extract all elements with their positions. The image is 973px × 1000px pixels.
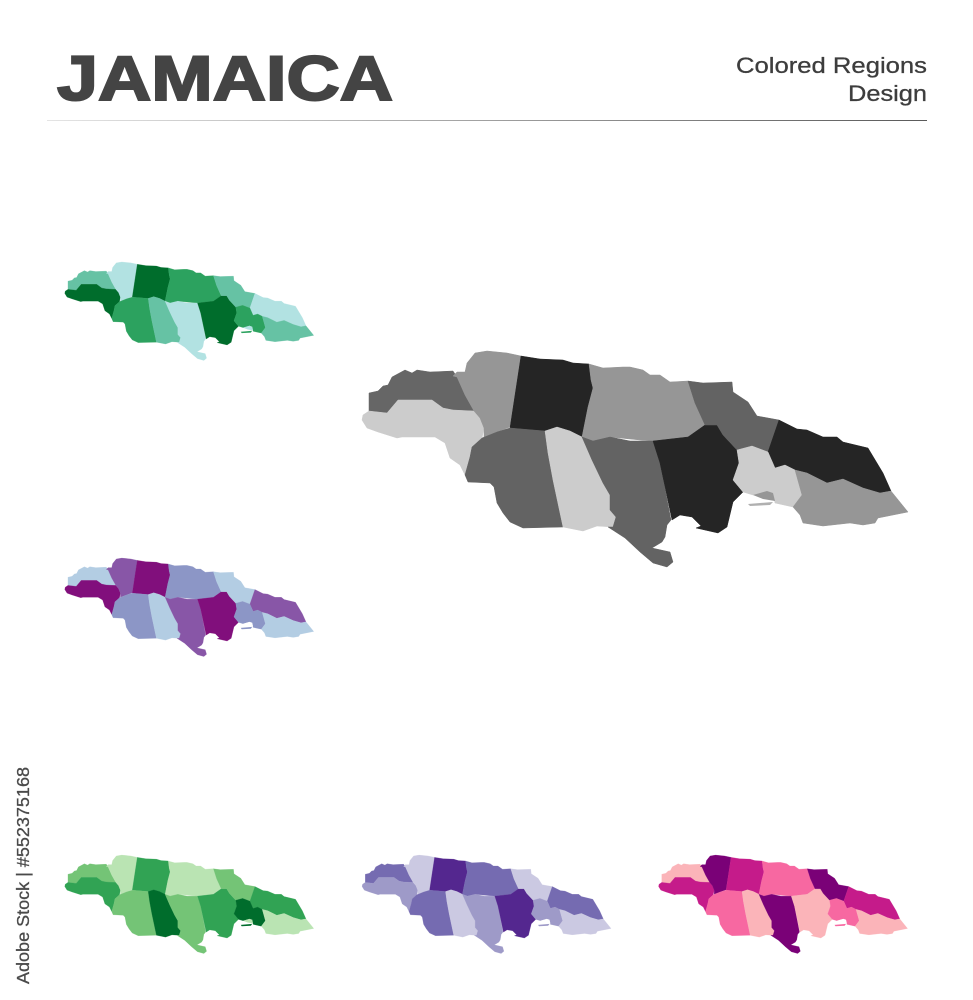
map: blue purple Jamaica xyxy=(65,558,314,657)
map: teal green Jamaica xyxy=(65,262,314,360)
subtitle: Design xyxy=(848,81,927,106)
region: Manchester xyxy=(545,427,616,531)
stock credit: Adobe Stock | #552375168 xyxy=(13,767,33,984)
region: St Thomas xyxy=(793,470,908,526)
region: St Catherine xyxy=(653,425,743,533)
region: St Ann xyxy=(582,364,705,441)
map: green Jamaica xyxy=(65,855,314,954)
header rule xyxy=(47,120,927,121)
title: JAMAICA xyxy=(57,44,393,114)
region: Trelawny xyxy=(510,356,593,437)
map: violet Jamaica xyxy=(362,855,611,954)
region: St Mary xyxy=(688,381,779,452)
region: Westmoreland xyxy=(362,400,484,475)
map: pink magenta Jamaica xyxy=(659,855,908,954)
region: Portland xyxy=(768,420,891,493)
subtitle xyxy=(736,53,927,106)
map: large grayscale Jamaica xyxy=(362,351,908,567)
harbour detail xyxy=(748,491,775,506)
region: St James xyxy=(453,351,521,437)
region: St Andrew xyxy=(733,446,802,507)
region: Clarendon xyxy=(582,437,673,567)
region: Hanover xyxy=(369,370,474,413)
subtitle: Colored Regions xyxy=(736,53,927,78)
region: St Elizabeth xyxy=(465,428,563,528)
